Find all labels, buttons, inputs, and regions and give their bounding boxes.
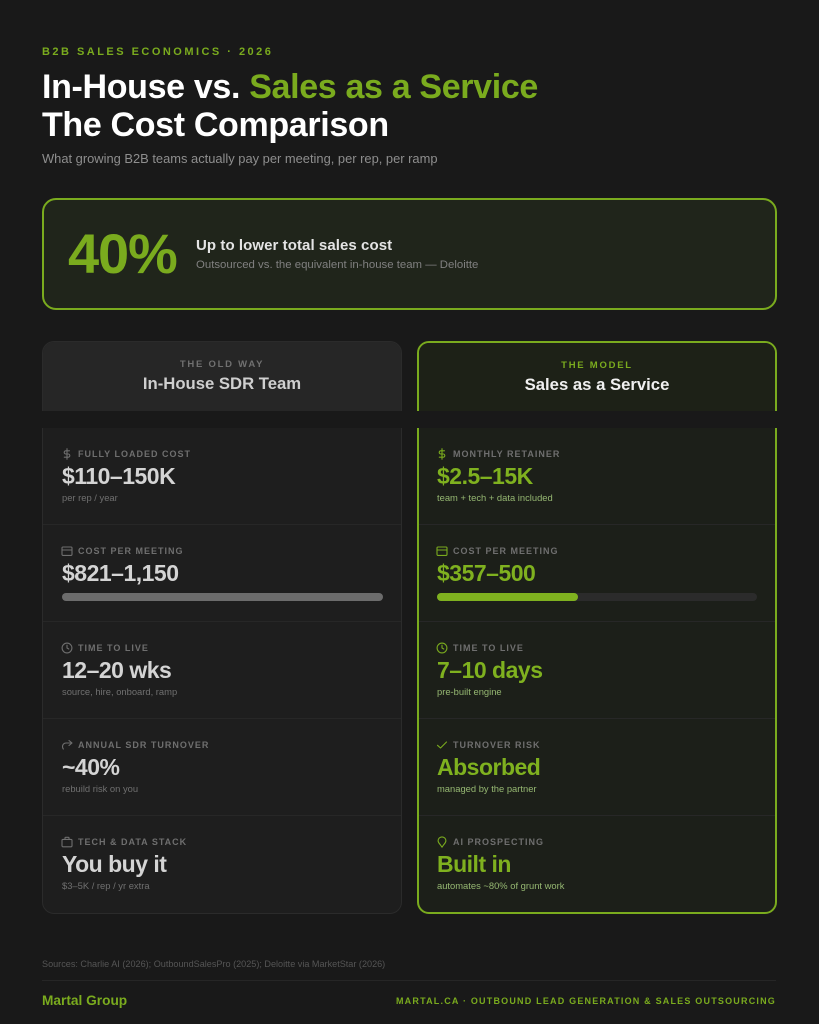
row: annual turnover: rebuild risk on you — [62, 783, 138, 794]
row: tech stack — [62, 836, 187, 891]
title: The Cost Comparison — [42, 106, 389, 144]
hero description: Outsourced vs. the equivalent in-house team — Deloitte — [196, 259, 478, 271]
row: time to live — [419, 642, 775, 719]
row: annual turnover — [43, 740, 401, 816]
brand: Martal Group — [42, 993, 127, 1008]
row: monthly retainer — [419, 448, 775, 525]
row: ai prospecting: automates ~80% of grunt work — [437, 880, 564, 891]
icon: bulb — [438, 836, 446, 848]
bar fill — [437, 593, 578, 601]
title — [42, 68, 538, 144]
column header: in-house — [43, 342, 401, 411]
row: ai prospecting: AI PROSPECTING — [453, 837, 544, 847]
divider band — [0, 411, 819, 428]
row: annual turnover: ~40% — [62, 754, 119, 780]
eyebrow: B2B SALES ECONOMICS · 2026 — [42, 46, 273, 58]
hero number: 40% — [68, 222, 177, 285]
header title: In-House SDR Team — [143, 374, 301, 393]
row: time to live: pre-built engine — [437, 686, 502, 697]
row: tech stack: TECH & DATA STACK — [78, 837, 187, 847]
row: turnover risk: TURNOVER RISK — [453, 740, 541, 750]
bar: full width — [62, 593, 383, 601]
row: time to live: 12–20 wks — [62, 657, 171, 683]
icon: card — [62, 546, 73, 556]
row: monthly retainer: team + tech + data included — [437, 492, 553, 503]
icon: clock — [62, 642, 72, 654]
column header: saas — [419, 343, 775, 411]
icon: dollar — [438, 448, 446, 460]
icon: dollar — [64, 448, 70, 460]
row: fully loaded cost: FULLY LOADED COST — [78, 449, 191, 459]
icon: redo arrow — [62, 740, 72, 750]
panel: sales as a service column — [417, 341, 777, 914]
row: cost per meeting: COST PER MEETING — [453, 546, 559, 556]
row: cost per meeting: $357–500 — [437, 560, 535, 586]
footer tagline: MARTAL.CA · OUTBOUND LEAD GENERATION & SALES OUTSOURCING — [396, 996, 776, 1006]
row: cost per meeting — [419, 546, 775, 622]
row: time to live: TIME TO LIVE — [78, 643, 149, 653]
icon: briefcase — [62, 836, 72, 848]
row: monthly retainer: MONTHLY RETAINER — [453, 449, 560, 459]
bar: partial — [437, 593, 757, 601]
row: time to live: source, hire, onboard, ramp — [62, 686, 177, 697]
row: fully loaded cost: $110–150K — [62, 463, 175, 489]
row: time to live: TIME TO LIVE — [453, 643, 524, 653]
header eyebrow: THE OLD WAY — [180, 359, 264, 370]
row: cost per meeting: COST PER MEETING — [78, 546, 184, 556]
row: cost per meeting — [43, 546, 401, 622]
row: turnover risk: managed by the partner — [437, 783, 537, 794]
header title: Sales as a Service — [525, 375, 669, 394]
row: fully loaded cost: per rep / year — [62, 492, 118, 503]
row: tech stack: You buy it — [62, 851, 166, 877]
sources: Sources: Charlie AI (2026); OutboundSalesPro (2025); Deloitte via MarketStar (2026) — [42, 959, 385, 969]
row: turnover risk — [419, 740, 775, 816]
row: time to live: 7–10 days — [437, 657, 542, 683]
header eyebrow: THE MODEL — [561, 360, 633, 371]
row: annual turnover: ANNUAL SDR TURNOVER — [78, 740, 209, 750]
row: time to live — [43, 642, 401, 719]
row: monthly retainer: $2.5–15K — [437, 463, 533, 489]
row: cost per meeting: $821–1,150 — [62, 560, 179, 586]
row: tech stack: $3–5K / rep / yr extra — [62, 880, 150, 891]
panel: in-house column — [42, 341, 402, 914]
icon: check — [437, 742, 447, 748]
icon: clock — [436, 642, 448, 654]
title: In-House vs. Sales as a Service — [42, 68, 538, 106]
row: ai prospecting: Built in — [437, 851, 511, 877]
subtitle: What growing B2B teams actually pay per meeting, per rep, per ramp — [42, 151, 438, 166]
panel: hero stat — [42, 198, 777, 310]
row: turnover risk: Absorbed — [437, 754, 540, 780]
hero heading: Up to lower total sales cost — [196, 237, 392, 254]
icon: card — [436, 546, 448, 556]
row: ai prospecting — [437, 836, 564, 891]
row: fully loaded cost — [43, 448, 401, 525]
